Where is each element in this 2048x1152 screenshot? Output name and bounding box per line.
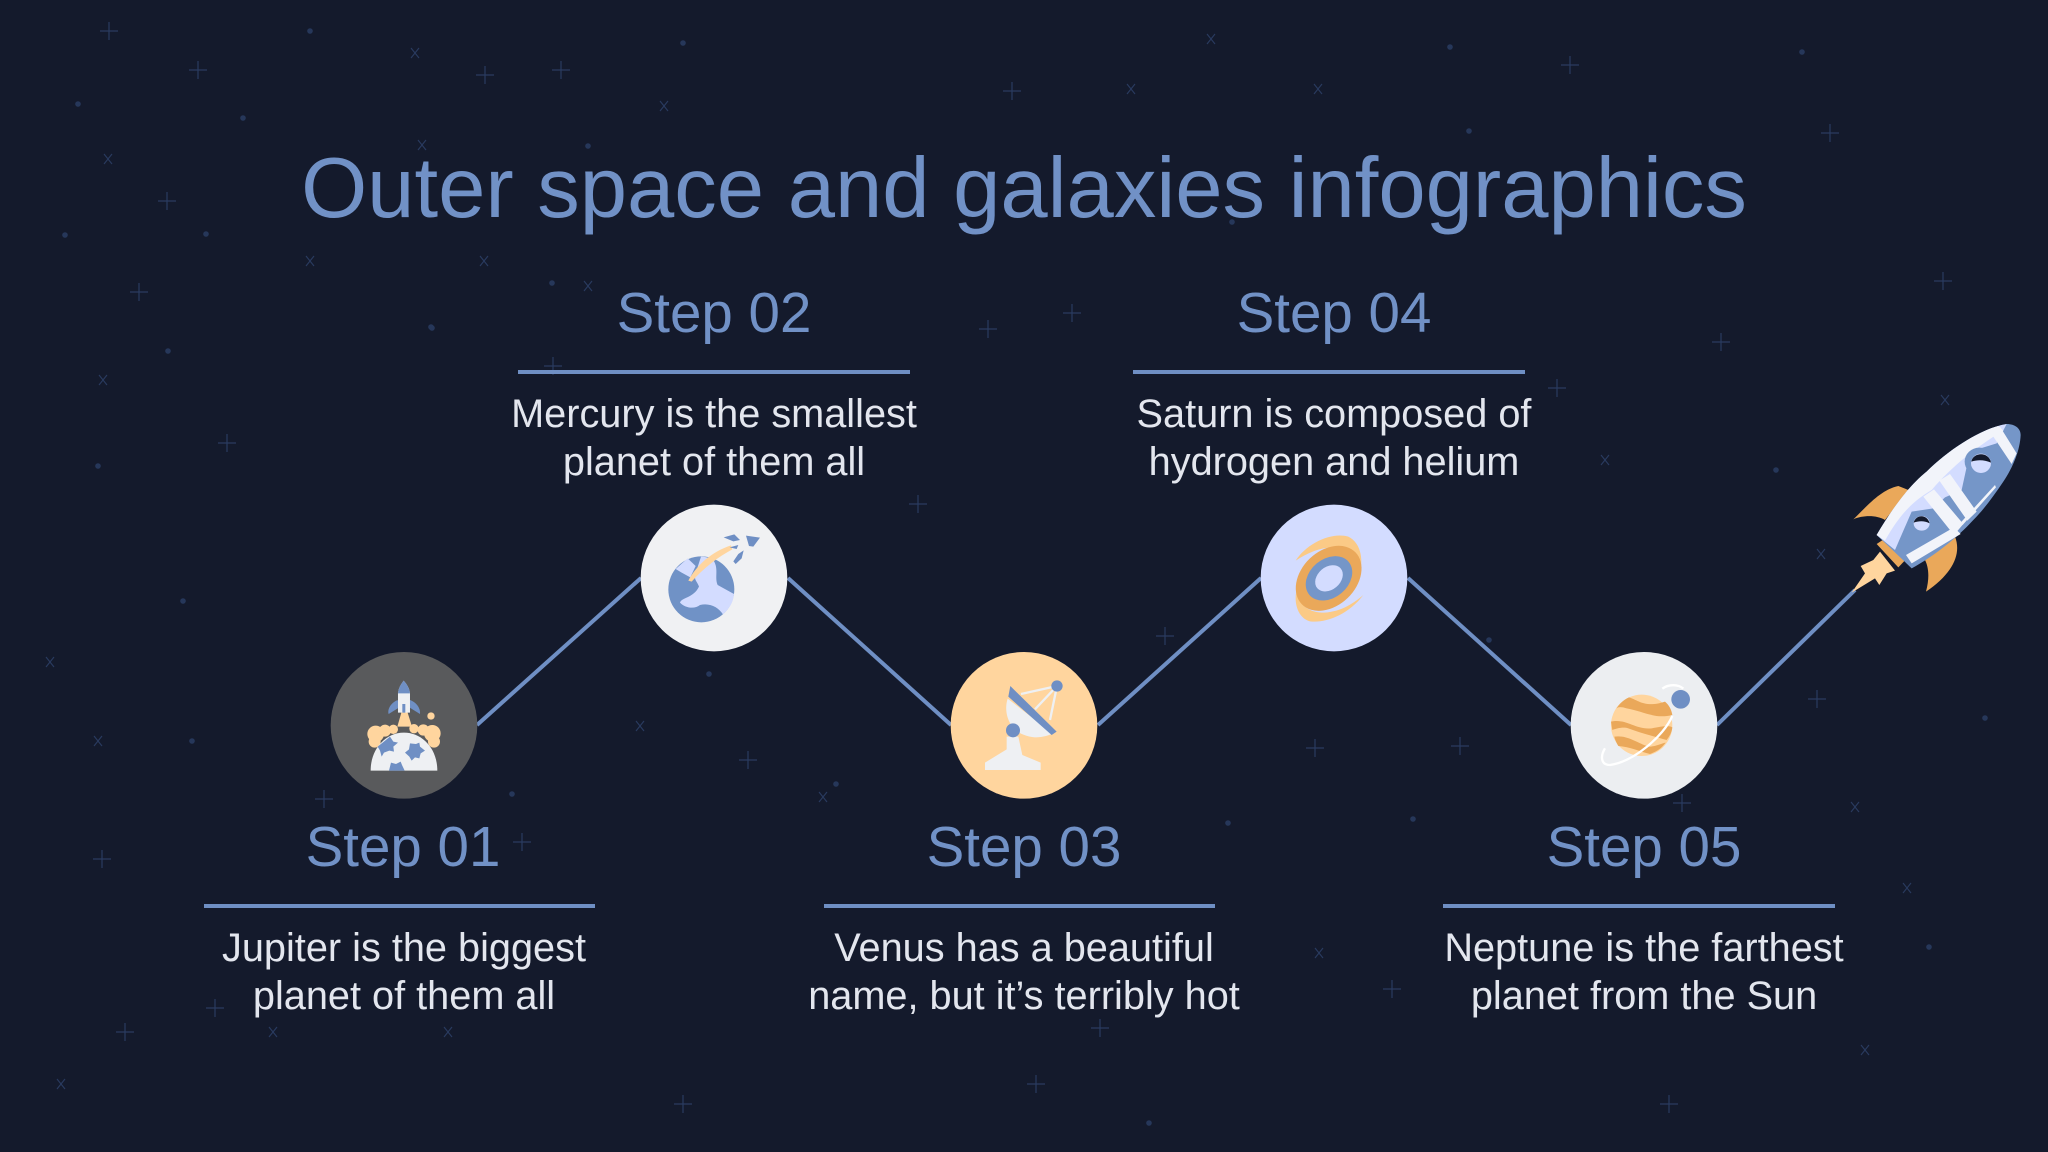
step 02 description: Mercury is the smallest [511,392,917,436]
step 02 [511,281,917,651]
step 02 description: planet of them all [563,440,865,484]
step 04 heading: Step 04 [1237,281,1431,344]
icon: rocket launching from moon [331,652,477,799]
step 05 rule [1443,904,1835,908]
step 01 rule [204,904,595,908]
title: Outer space and galaxies infographics [301,141,1747,236]
icon: planet with orbiting moon [1571,652,1717,799]
step 04 rule [1133,370,1525,374]
rocket flame [1852,552,1895,593]
step 05 [1443,652,1844,1018]
step 04 description: hydrogen and helium [1149,440,1519,484]
step 05 heading: Step 05 [1547,815,1741,878]
step 02 rule [518,370,910,374]
step 05 description: Neptune is the farthest [1444,926,1844,970]
step 03 description: Venus has a beautiful [834,926,1214,970]
rocket windows [1965,448,1994,476]
step 04 description: Saturn is composed of [1137,392,1532,436]
step 02 heading: Step 02 [617,281,811,344]
icon: satellite dish [951,652,1097,799]
step 05 description: planet from the Sun [1471,974,1817,1018]
step 03 heading: Step 03 [927,815,1121,878]
step 03 [808,652,1240,1018]
step 01 description: Jupiter is the biggest [222,926,586,970]
step 03 rule [824,904,1215,908]
rocket engine [1877,540,1905,567]
step 01 [204,652,595,1018]
rocket [1852,424,2021,593]
icon: galaxy [1261,505,1407,651]
connecting line [477,578,1855,725]
rocket fins [1853,486,1957,592]
step 01 heading: Step 01 [306,815,500,878]
step 04 [1133,281,1532,651]
icon: comet hitting earth [641,505,787,651]
step 03 description: name, but it’s terribly hot [808,974,1240,1018]
step 01 description: planet of them all [253,974,555,1018]
rocket body [1877,424,2021,568]
